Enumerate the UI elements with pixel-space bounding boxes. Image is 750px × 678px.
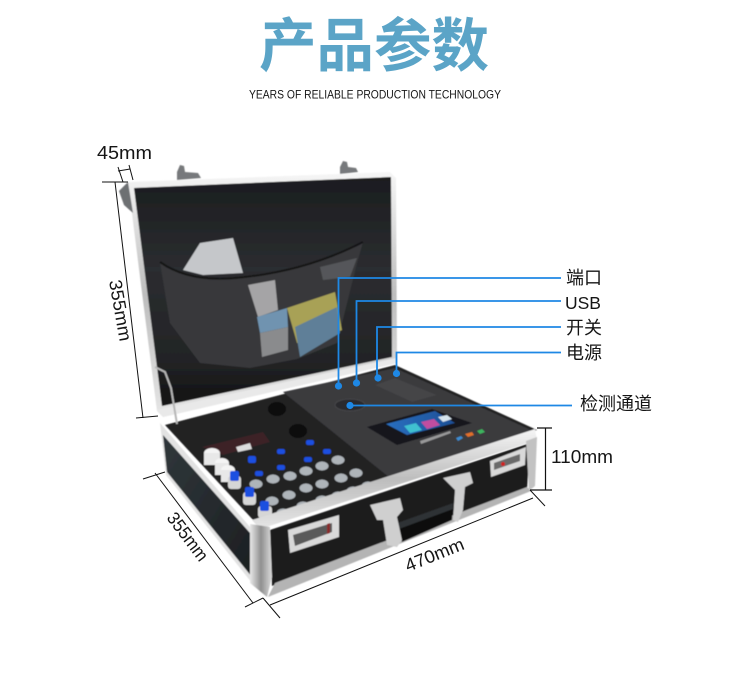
callout: 开关 <box>374 318 602 382</box>
mesh pocket <box>160 238 363 368</box>
subtitle: YEARS OF RELIABLE PRODUCTION TECHNOLOGY <box>249 88 501 102</box>
cable <box>155 367 177 424</box>
dimension: 470mm width: 470mm <box>402 534 467 576</box>
dimension: 355mm lid height <box>105 182 158 418</box>
combination lock left <box>288 515 339 553</box>
dimension: 355mm lid height: 355mm <box>105 278 136 343</box>
blue vial caps <box>248 440 331 476</box>
callout: 电源 <box>393 343 602 377</box>
callout: 电源: 电源 <box>566 343 602 363</box>
instrument panel <box>283 368 531 478</box>
title: 产品参数 <box>259 14 489 79</box>
foam interior <box>165 365 537 522</box>
left side face <box>160 423 252 583</box>
photo: open instrument case <box>119 161 537 597</box>
callout: 检测通道 <box>346 394 652 414</box>
case lid <box>119 161 397 417</box>
foam compartments <box>202 402 307 455</box>
aluminium edges <box>252 429 537 529</box>
dimension: 110mm height <box>530 428 613 490</box>
callout: 检测通道: 检测通道 <box>580 394 652 414</box>
callout: 端口 <box>335 268 602 390</box>
dimension: 45mm <box>97 143 152 182</box>
case base <box>155 365 537 597</box>
dimension: 470mm width <box>263 490 545 618</box>
callout: 开关: 开关 <box>566 318 602 338</box>
callout: USB <box>353 293 601 387</box>
latch right <box>443 472 473 522</box>
combination lock right <box>490 447 526 477</box>
front face <box>270 443 530 586</box>
touch screen <box>367 409 485 445</box>
handle <box>397 503 453 542</box>
callout: USB: USB <box>565 293 601 313</box>
dimension: 110mm height: 110mm <box>551 447 613 467</box>
latch left <box>370 498 403 547</box>
dimension: 355mm depth: 355mm <box>163 508 212 565</box>
dimension: 45mm: 45mm <box>97 143 152 163</box>
grey vial caps <box>250 456 374 518</box>
white bottles <box>204 448 272 518</box>
callout: 端口: 端口 <box>566 268 602 288</box>
dimension: 355mm depth <box>143 472 263 607</box>
